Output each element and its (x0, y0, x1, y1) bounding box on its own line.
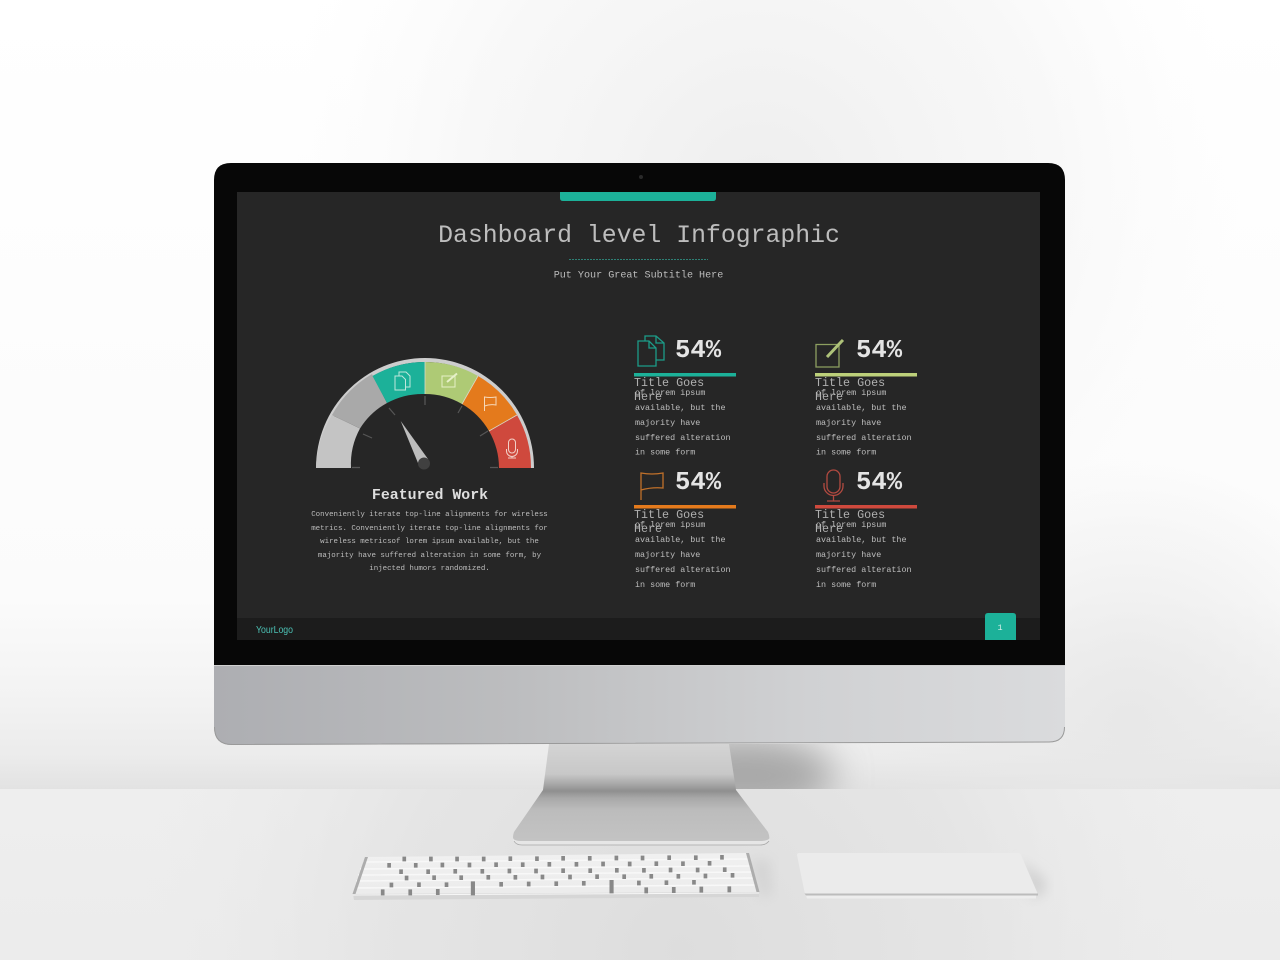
card title: Here (815, 522, 843, 536)
segment: teal (372, 362, 425, 403)
title divider (569, 258, 708, 260)
card body: of lorem ipsum (816, 520, 886, 530)
featured work paragraph (311, 511, 548, 573)
footer band (237, 618, 1040, 640)
top accent tab (560, 192, 716, 201)
gauge rim (316, 358, 534, 468)
segment: grey (332, 374, 387, 428)
monitor (214, 163, 1065, 745)
monitor chin (214, 665, 1065, 745)
icon: gauge edit (442, 374, 457, 387)
card body: suffered alteration (816, 433, 912, 443)
needle hub (418, 458, 430, 470)
segment: red (489, 415, 531, 468)
card title: Title Goes (634, 376, 704, 390)
gauge ticks (352, 396, 498, 468)
trackpad (797, 853, 1046, 898)
keyboard body (353, 853, 759, 899)
featured work paragraph: majority have suffered alteration in some form, by (318, 552, 542, 560)
icon: gauge documents (395, 372, 410, 390)
card body: majority have (816, 550, 881, 560)
featured work heading: Featured Work (372, 488, 488, 504)
subtitle: Put Your Great Subtitle Here (554, 270, 723, 282)
value: 54% (856, 336, 903, 365)
card title: Here (815, 390, 843, 404)
value: 54% (856, 468, 903, 497)
featured work paragraph: metrics. Conveniently iterate top-line alignments for (311, 525, 548, 533)
card body: suffered alteration (635, 565, 730, 575)
card body: in some form (635, 448, 695, 458)
card body: in some form (635, 580, 695, 590)
card body: suffered alteration (635, 433, 730, 443)
stat card: edit (815, 336, 917, 458)
monitor bezel (214, 163, 1065, 665)
card title: Title Goes (815, 376, 885, 390)
stat card: documents (634, 336, 736, 458)
icon: edit (816, 340, 843, 367)
segment separators (425, 362, 517, 431)
card title: Title Goes (815, 508, 885, 522)
key row highlights (355, 859, 757, 888)
card body: of lorem ipsum (635, 520, 705, 530)
bar (815, 373, 917, 376)
card body: majority have (816, 418, 881, 428)
card body: available, but the (635, 403, 725, 413)
needle (401, 421, 428, 463)
card body: in some form (816, 448, 876, 458)
card body: majority have (635, 550, 700, 560)
card title: Title Goes (634, 508, 704, 522)
featured work paragraph: wireless metricsof lorem ipsum available, but the (320, 538, 539, 546)
icon: microphone (824, 470, 843, 501)
stat card: microphone (815, 468, 917, 590)
icon: gauge flag (484, 397, 496, 411)
segment: orange (462, 376, 517, 431)
bar (634, 373, 736, 376)
slide screen (237, 192, 1040, 640)
card title: Here (634, 390, 662, 404)
keyboard (352, 853, 772, 900)
card body: suffered alteration (816, 565, 912, 575)
trackpad front edge (804, 894, 1038, 896)
stand shadow on wall (729, 744, 848, 789)
key gaps (381, 855, 734, 895)
gauge chart (316, 358, 534, 470)
keyboard side edges (352, 853, 760, 894)
card body: available, but the (816, 535, 906, 545)
card body: of lorem ipsum (635, 388, 705, 398)
card body: available, but the (635, 535, 725, 545)
segment: green (425, 362, 478, 404)
page number tab (985, 613, 1016, 640)
card title: Here (634, 522, 662, 536)
icon: gauge microphone (506, 439, 518, 458)
page number tab: 1 (997, 623, 1003, 633)
value: 54% (675, 468, 722, 497)
keyboard shadow (750, 860, 772, 896)
icon: flag (641, 473, 663, 500)
trackpad shadow (1020, 860, 1046, 896)
card body: majority have (635, 418, 700, 428)
monitor stand (513, 744, 770, 845)
keyboard front edge (353, 892, 759, 900)
featured work paragraph: injected humors randomized. (369, 565, 490, 573)
title: Dashboard level Infographic (438, 222, 840, 250)
bar (815, 505, 917, 508)
featured work paragraph: Conveniently iterate top-line alignments for wireless (311, 511, 548, 519)
value: 54% (675, 336, 722, 365)
icon: documents (638, 336, 664, 366)
bar (634, 505, 736, 508)
footer logo: YourLogo (256, 624, 293, 636)
card body: in some form (816, 580, 876, 590)
stat card: flag (634, 468, 736, 590)
card body: available, but the (816, 403, 906, 413)
segment: light grey (316, 415, 360, 468)
trackpad top surface (797, 853, 1037, 894)
card body: of lorem ipsum (816, 388, 886, 398)
webcam (639, 175, 643, 179)
background: desk (0, 789, 1280, 960)
